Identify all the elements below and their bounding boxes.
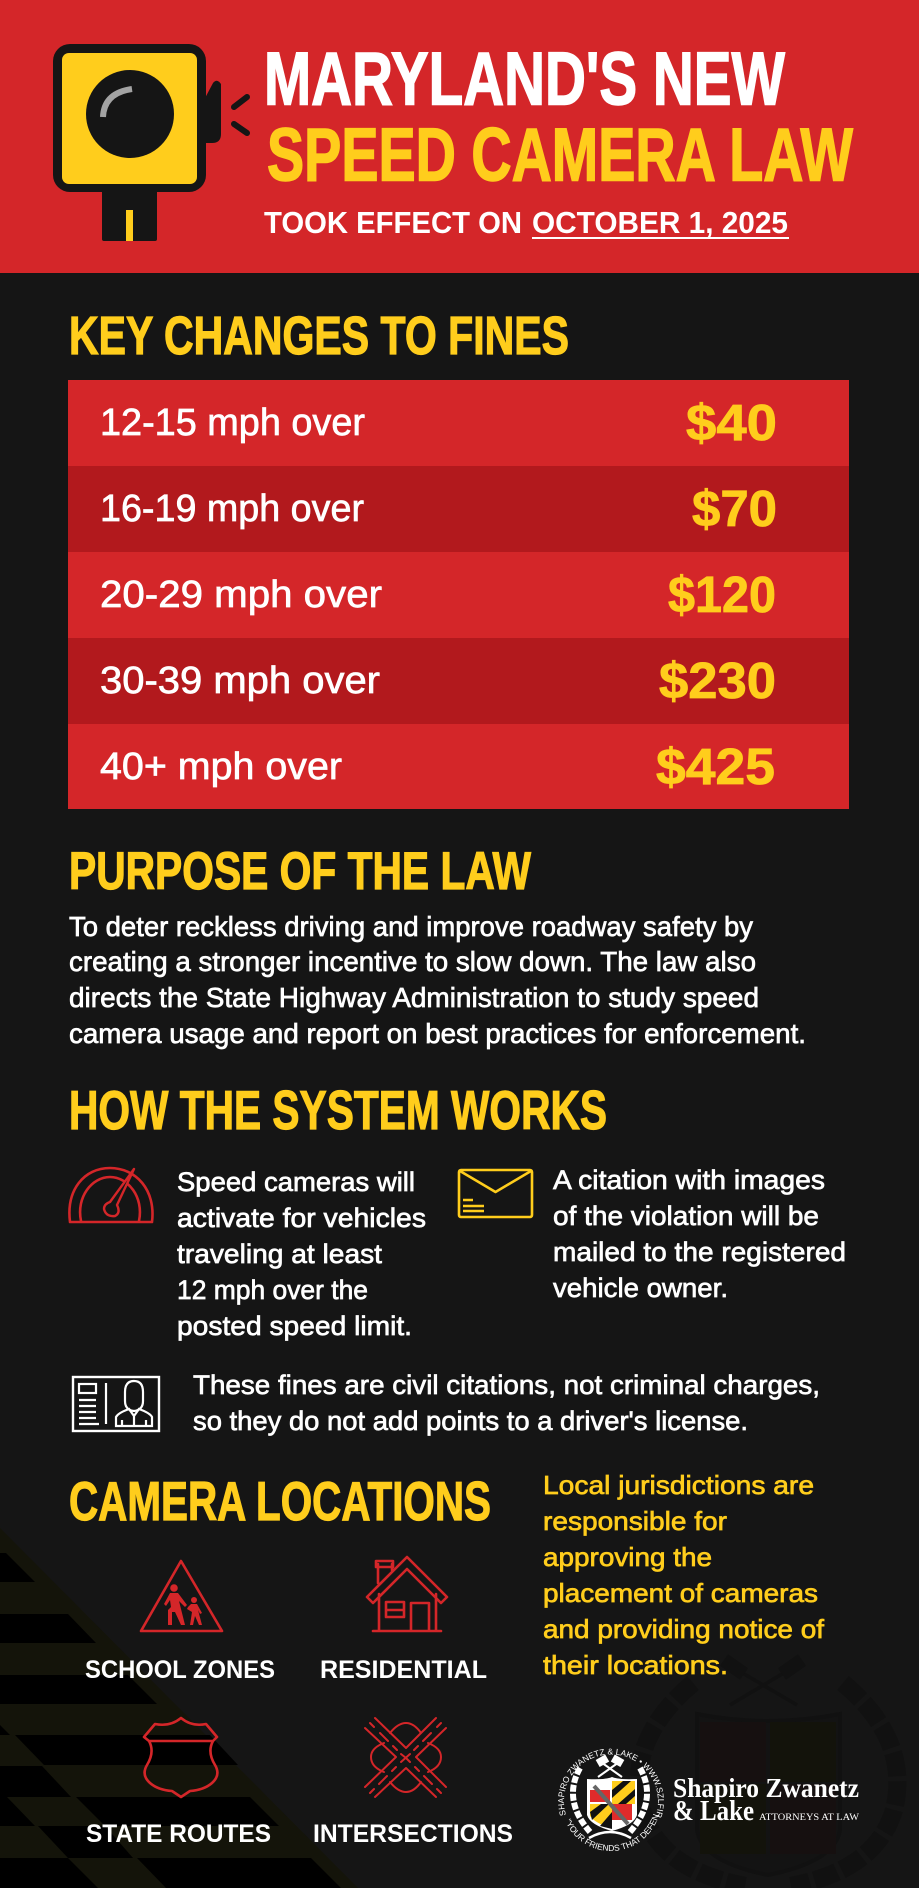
label: residential: RESIDENTIAL [320, 1656, 487, 1684]
location: residential [320, 1557, 487, 1684]
callout: local jurisdictions: Local jurisdictions are [543, 1470, 814, 1500]
logo seal: SHAPIRO ZWANETZ & LAKE • WWW.SZLFIRM.COM [558, 1748, 664, 1818]
location: school zones [85, 1561, 275, 1684]
step: speed camera activation text: 12 mph over the [177, 1275, 368, 1305]
background: faint firm seal watermark [639, 1660, 897, 1886]
row: 30-39 mph: $230 [659, 652, 776, 709]
logo seal: "YOUR FRIENDS THAT DEFEND" [568, 1814, 658, 1851]
step: citation mailed text: A citation with images [553, 1165, 825, 1195]
callout: local jurisdictions [543, 1470, 825, 1680]
icon: highway shield [144, 1718, 217, 1797]
callout: local jurisdictions: responsible for [543, 1506, 727, 1536]
step: speed camera activation text: posted speed limit. [177, 1311, 412, 1341]
label: state routes: STATE ROUTES [86, 1820, 271, 1848]
icon: crossroads [365, 1718, 446, 1797]
icon: speedometer [69, 1168, 153, 1222]
icon: driver's license [73, 1377, 159, 1431]
background: checkered triangle [0, 1528, 358, 1888]
note: civil citations: These fines are civil citations, not criminal charges, [193, 1370, 820, 1400]
logo seal [558, 1748, 664, 1851]
effective date: TOOK EFFECT ON [264, 205, 522, 240]
row: 16-19 mph: $70 [692, 480, 777, 537]
row: 12-15 mph: $40 [686, 394, 777, 451]
step: citation mailed text: vehicle owner. [553, 1273, 728, 1303]
row: 16-19 mph: 16-19 mph over [100, 488, 364, 530]
purpose paragraph: directs the State Highway Administration to study speed [69, 982, 759, 1013]
heading: purpose of the law: PURPOSE OF THE LAW [69, 842, 531, 901]
row: 12-15 mph [100, 394, 777, 451]
purpose paragraph [69, 911, 806, 1049]
callout: local jurisdictions: their locations. [543, 1650, 728, 1680]
icon: envelope [459, 1170, 532, 1217]
row: 30-39 mph [100, 652, 776, 709]
step: citation mailed text: mailed to the registered [553, 1237, 846, 1267]
step: speed camera activation text: Speed cameras will [177, 1167, 415, 1197]
purpose paragraph: creating a stronger incentive to slow down. The law also [69, 946, 756, 977]
purpose paragraph: camera usage and report on best practices for enforcement. [69, 1018, 806, 1049]
row: 16-19 mph [100, 480, 777, 537]
row: 30-39 mph: 30-39 mph over [100, 660, 380, 702]
icon: school crossing sign [141, 1561, 222, 1631]
step: citation mailed text [553, 1165, 846, 1303]
heading: how the system works: HOW THE SYSTEM WORKS [69, 1079, 607, 1141]
callout: local jurisdictions: approving the [543, 1542, 712, 1572]
step: citation mailed text: of the violation will be [553, 1201, 819, 1231]
purpose paragraph: To deter reckless driving and improve roadway safety by [69, 911, 753, 942]
location: intersections [313, 1718, 513, 1848]
row: 20-29 mph: 20-29 mph over [100, 574, 382, 616]
heading: key changes to fines: KEY CHANGES TO FINES [69, 306, 569, 366]
row: 12-15 mph: 12-15 mph over [100, 402, 365, 444]
note: civil citations: so they do not add points to a driver's license. [193, 1406, 748, 1436]
location: state routes [86, 1718, 271, 1848]
step: speed camera activation text: traveling at least [177, 1239, 383, 1269]
label: school zones: SCHOOL ZONES [85, 1656, 275, 1684]
icon: speed camera [53, 44, 247, 241]
fines table [68, 380, 849, 809]
row: 40+ mph: 40+ mph over [100, 746, 342, 788]
row: 20-29 mph [100, 566, 776, 623]
step: speed camera activation text [177, 1167, 426, 1341]
logo wordmark: ATTORNEYS AT LAW [759, 1812, 860, 1822]
effective date [264, 205, 789, 240]
step: speed camera activation text: activate for vehicles [177, 1203, 426, 1233]
logo wordmark: & Lake [673, 1795, 754, 1827]
label: intersections: INTERSECTIONS [313, 1820, 513, 1848]
callout: local jurisdictions: and providing notice of [543, 1614, 825, 1644]
logo wordmark: Shapiro Zwanetz [673, 1773, 859, 1803]
header banner [0, 0, 919, 273]
logo wordmark [673, 1773, 860, 1827]
note: civil citations [193, 1370, 820, 1436]
effective date: OCTOBER 1, 2025 [532, 205, 788, 240]
icon: house [367, 1557, 447, 1631]
callout: local jurisdictions: placement of cameras [543, 1578, 818, 1608]
row: 40+ mph [100, 738, 775, 795]
row: 40+ mph: $425 [656, 738, 775, 795]
row: 20-29 mph: $120 [668, 566, 776, 623]
heading: camera locations: CAMERA LOCATIONS [69, 1470, 491, 1532]
